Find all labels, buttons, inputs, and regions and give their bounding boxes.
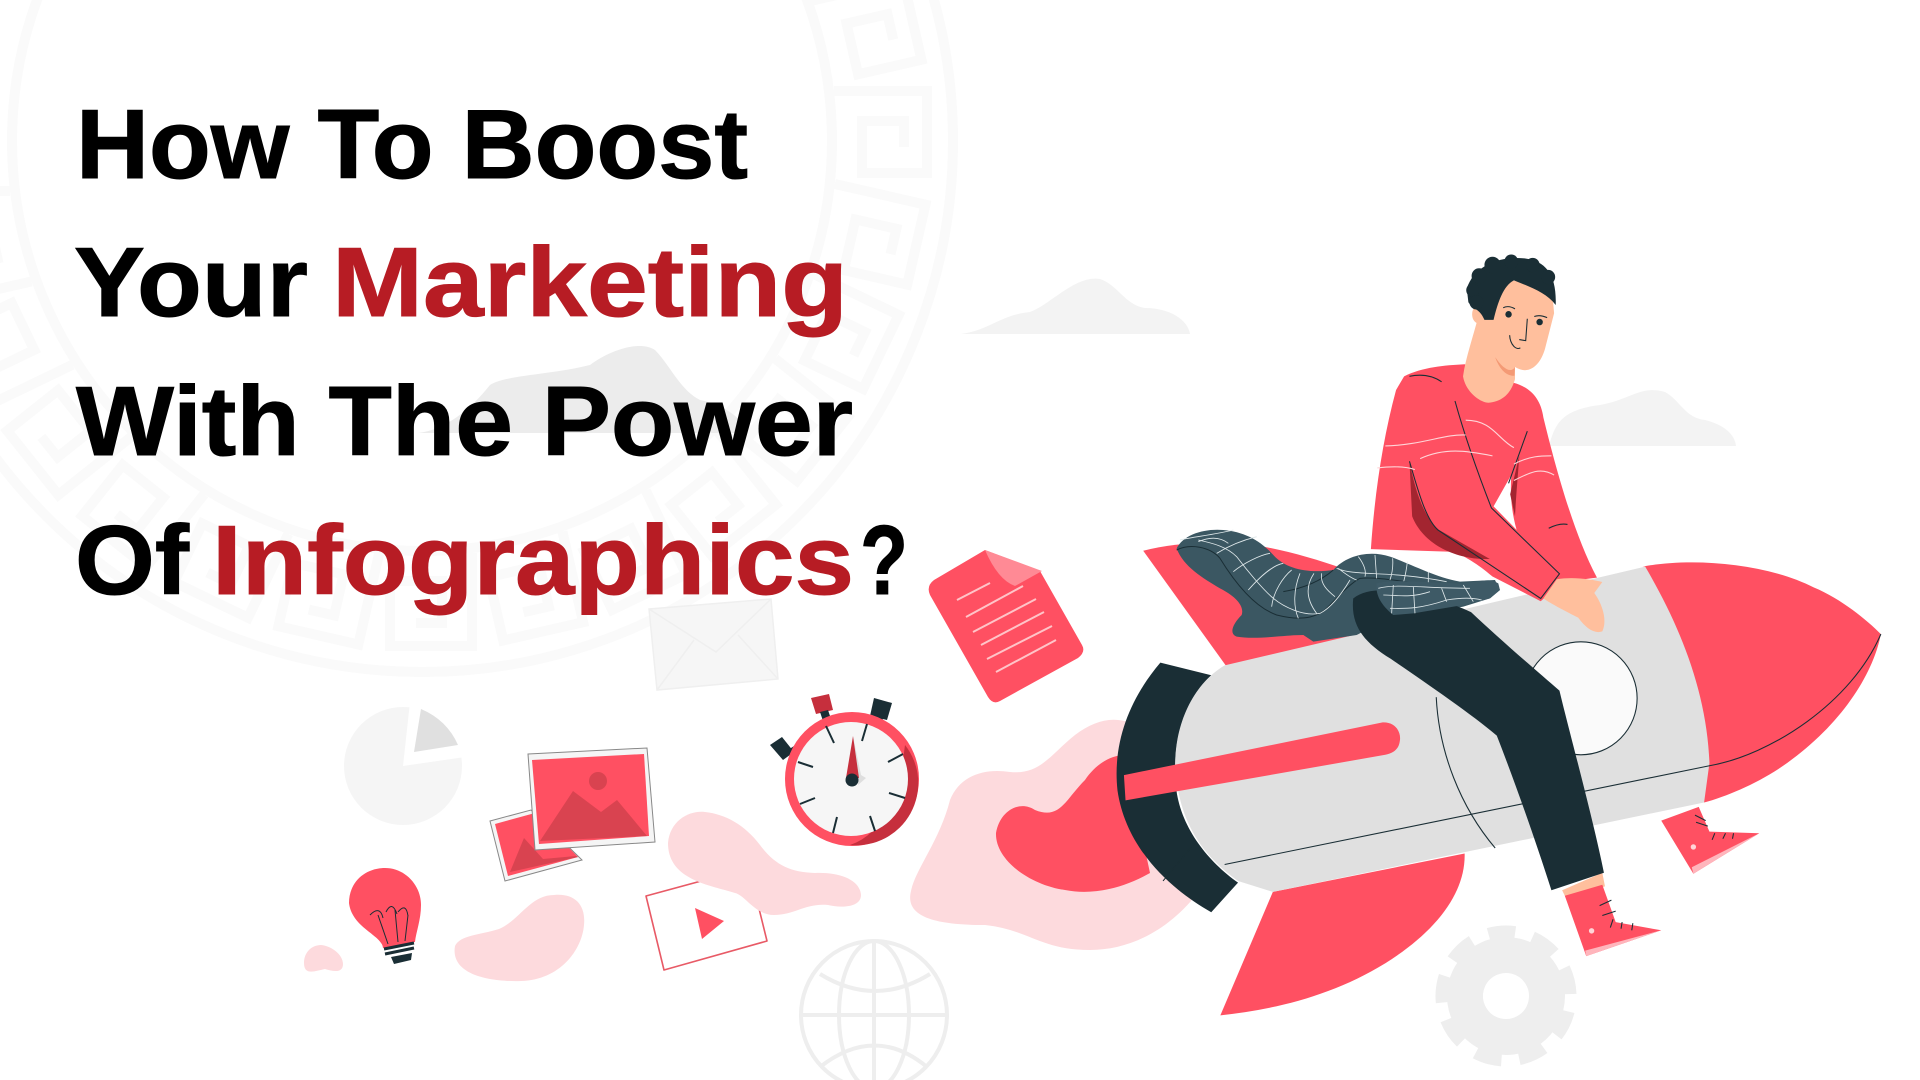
rocket seam lines xyxy=(1163,634,1881,881)
exhaust smoke: middle blob xyxy=(668,812,861,915)
scarf knot over waist xyxy=(1376,580,1500,615)
rocket flame xyxy=(996,755,1150,892)
back shoe xyxy=(1661,807,1759,874)
nozzle xyxy=(1117,663,1238,912)
title: Of xyxy=(75,505,189,615)
icon: stopwatch xyxy=(770,694,919,846)
title: ? xyxy=(860,505,908,615)
trousers xyxy=(1353,590,1604,890)
rocket and rider illustration xyxy=(1117,255,1881,1015)
icon: pie chart xyxy=(344,702,470,825)
exhaust smoke: small blob xyxy=(304,945,343,972)
icon: document xyxy=(929,550,1083,702)
sweater xyxy=(1371,364,1597,601)
front shoe xyxy=(1562,873,1661,956)
top fin xyxy=(1143,543,1359,665)
rocket window xyxy=(1525,642,1637,755)
bottom fin xyxy=(1220,854,1465,1015)
title: Infographics xyxy=(212,505,854,615)
stopwatch crown and buttons xyxy=(770,694,892,760)
icon: light bulb xyxy=(349,868,421,964)
title xyxy=(74,89,908,615)
hair xyxy=(1466,255,1556,320)
cloud: behind title xyxy=(418,346,746,433)
head xyxy=(1463,255,1556,403)
title: Marketing xyxy=(332,227,848,337)
face details xyxy=(1503,307,1547,349)
title: How To Boost xyxy=(76,89,748,199)
exhaust smoke: large cloud xyxy=(910,720,1200,950)
icon: envelope xyxy=(649,599,778,690)
ear xyxy=(1472,305,1486,324)
background meander ring xyxy=(0,0,953,672)
icon: small photo xyxy=(490,810,582,881)
icon: globe xyxy=(801,941,947,1080)
cloud: upper centre xyxy=(961,279,1190,334)
rocket red stripe xyxy=(1124,722,1400,800)
cloud: right xyxy=(1549,390,1736,446)
hand xyxy=(1543,578,1604,632)
exhaust smoke: lower blob xyxy=(455,895,584,981)
plaid scarf xyxy=(1177,530,1500,642)
icon: video card xyxy=(646,868,767,970)
icon: large photo xyxy=(528,748,655,850)
icon: gear xyxy=(1431,921,1581,1071)
title: Your xyxy=(74,227,308,337)
rocket body xyxy=(1175,567,1709,892)
title: With The Power xyxy=(76,366,853,476)
rocket nose xyxy=(1642,562,1881,803)
